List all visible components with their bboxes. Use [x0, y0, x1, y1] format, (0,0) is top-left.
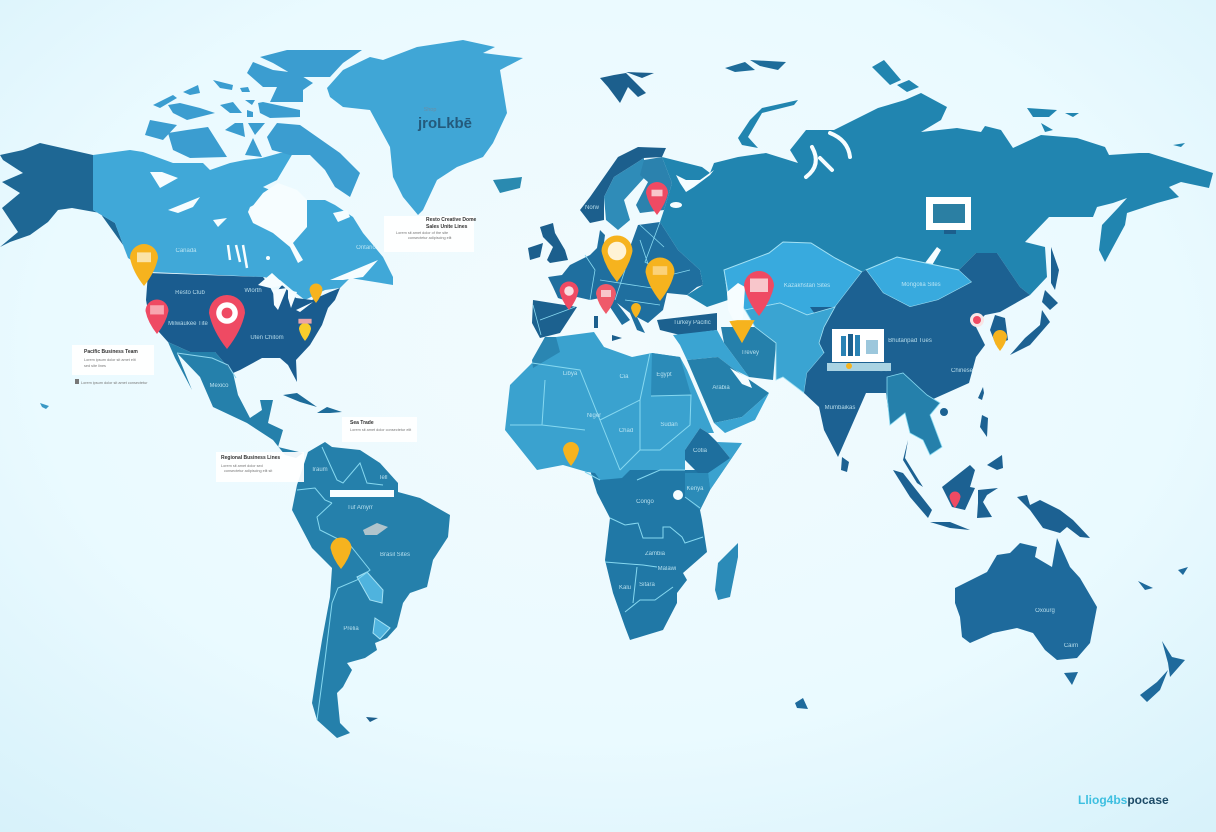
callout: north Atlantic: consectetur adipiscing elit	[408, 236, 452, 240]
pin: Iran	[729, 320, 755, 343]
South America labels: Prelia	[343, 626, 359, 632]
Ireland	[528, 243, 543, 260]
Mongolia	[866, 257, 972, 307]
pin: Toronto	[310, 284, 322, 303]
Continental Europe	[548, 222, 703, 333]
callout: Caribbean: Sea Trade	[350, 420, 374, 426]
Hudson Bay	[248, 183, 307, 263]
New Guinea	[1017, 495, 1090, 538]
region: Oceania	[795, 538, 1188, 709]
region: North America	[0, 40, 523, 458]
Africa labels: Zambia	[645, 551, 666, 557]
lake	[363, 523, 388, 535]
Africa labels: Sitara	[639, 582, 655, 588]
China	[810, 253, 1030, 400]
Java	[930, 522, 970, 530]
Japan	[1010, 290, 1058, 355]
South America labels: Iraum	[312, 467, 328, 473]
Svalbard	[600, 72, 654, 103]
Novaya Zemlya	[738, 100, 798, 148]
Greenland	[327, 40, 523, 215]
Canada	[93, 150, 393, 300]
callout: north Atlantic: Lorem sit amet dolor of the site	[396, 231, 448, 235]
callout: South America: consectetur adipiscing elit sit	[224, 469, 273, 473]
pin: Washington	[298, 319, 312, 341]
Somalia	[708, 442, 742, 490]
callout: Pacific	[72, 345, 154, 375]
South America labels: Tell	[378, 475, 388, 481]
Philippines	[980, 415, 1003, 470]
Africa labels: Kalu	[619, 585, 631, 591]
Cuba and Hispaniola	[283, 393, 342, 413]
Madagascar	[715, 543, 738, 600]
callout: Caribbean: Lorem sit amet dolor consectetur elit	[350, 428, 412, 432]
Gulf	[730, 368, 752, 388]
Paraguay and Uruguay	[357, 572, 390, 639]
Greenland title	[417, 107, 472, 132]
Korea	[990, 315, 1008, 345]
Canadian Arctic islands	[145, 50, 362, 158]
pin: Japan	[993, 330, 1007, 351]
Baffin Island	[267, 123, 360, 197]
callout: north Atlantic: Sales Unite Lines	[426, 224, 468, 230]
Eurasia labels: Mongolia Sites	[901, 282, 941, 288]
Hainan	[940, 408, 948, 416]
Ob Gulf channels	[806, 133, 850, 177]
North America labels: Canada	[175, 248, 197, 254]
pin: Korea red	[970, 313, 984, 327]
Tasmania	[1064, 672, 1078, 685]
North America labels: Ontario	[356, 245, 376, 251]
callout: South America: Regional Business Lines	[221, 455, 280, 461]
Africa labels: Chad	[619, 428, 633, 434]
footer logo: Lliog4bspocase	[1078, 793, 1169, 807]
pin: West Africa	[563, 442, 579, 466]
Eurasia labels: Kazakhstan Sites	[784, 283, 830, 289]
pin: Romania	[646, 258, 674, 301]
Southern Africa	[590, 443, 742, 640]
pin: Germany	[602, 236, 632, 282]
South America labels	[312, 467, 410, 632]
borders	[297, 447, 383, 720]
Australia labels	[1035, 608, 1078, 649]
Central Asia and Pakistan	[745, 303, 835, 393]
region: Asia	[660, 60, 1213, 538]
Arabia	[687, 357, 769, 423]
Africa labels: Cotia	[693, 448, 708, 454]
pin: France	[560, 282, 578, 310]
Ethiopia	[685, 428, 730, 475]
Sri Lanka	[841, 457, 849, 472]
Mediterranean islands	[560, 316, 622, 341]
Kenya and Uganda	[685, 473, 710, 510]
pin: Greece	[631, 303, 641, 318]
White Sea	[676, 170, 714, 192]
Africa labels: Cia	[619, 374, 629, 380]
South America landmass	[292, 442, 450, 738]
Pacific islands	[795, 567, 1188, 709]
India	[804, 353, 900, 457]
Africa labels: Niger	[587, 413, 601, 419]
Lake Baikal	[925, 247, 941, 267]
Borneo	[942, 465, 975, 510]
Australia	[955, 538, 1097, 660]
region: Africa	[505, 332, 742, 640]
pin: Peru	[330, 538, 352, 569]
map labels	[168, 107, 1078, 649]
Arctic islands	[872, 60, 1185, 147]
Egypt	[651, 353, 691, 396]
Franz Josef Land	[725, 60, 786, 72]
Indochina	[887, 373, 942, 455]
Northern Africa	[505, 332, 714, 480]
North America labels	[168, 245, 376, 389]
North America labels: Resto Club	[175, 290, 206, 296]
African borders	[510, 353, 703, 612]
Finland	[636, 157, 672, 213]
North America labels: Milwaukee Tite	[168, 321, 209, 327]
Yemen and Oman	[714, 393, 769, 433]
callout: north Atlantic: Resto Creative Dome	[426, 217, 477, 223]
Eurasia labels: Turkey Pacific	[673, 320, 711, 326]
Mexico and Central America	[168, 342, 303, 458]
Sweden	[604, 158, 644, 230]
Great Lakes	[258, 273, 313, 312]
Greenland title: Shop	[424, 107, 436, 113]
pins	[130, 182, 1007, 569]
pin: Borneo	[950, 492, 960, 508]
Eurasia labels: Arabia	[712, 385, 730, 391]
Africa labels	[563, 371, 708, 591]
Iceland	[493, 177, 522, 193]
Turkey	[657, 313, 717, 335]
callout: Pacific: Pacific Business Team	[84, 349, 138, 355]
pin: Caspian	[744, 271, 774, 316]
Eurasia labels: Norw	[585, 205, 600, 211]
Sulawesi	[977, 488, 998, 518]
Iberia	[532, 300, 577, 338]
Hawaii	[40, 403, 49, 409]
South America labels: Brasil Sites	[380, 552, 410, 558]
Lake Victoria	[673, 490, 683, 500]
Africa labels: Libya	[563, 371, 578, 377]
pin: Finland	[646, 182, 668, 215]
Kazakhstan	[724, 242, 862, 315]
North America labels: Uten Chitom	[250, 335, 284, 341]
North America labels: Mexico	[209, 383, 229, 389]
Russia	[660, 93, 1213, 307]
pin: Italy	[596, 284, 616, 314]
Eurasia labels: Mumbaikas	[825, 405, 855, 411]
Taiwan	[978, 387, 984, 400]
Iran	[721, 327, 776, 380]
pin: central US	[209, 295, 245, 349]
Malay Peninsula	[903, 440, 923, 487]
region: Europe	[528, 72, 717, 341]
Sakhalin	[1051, 247, 1059, 290]
callout: South America: Lorem sit amet dolor sed	[221, 464, 263, 468]
pin: Vancouver	[130, 244, 158, 286]
Eurasia labels: Trevey	[741, 350, 759, 356]
legend line: Lorem ipsum dolor sit amet consectetur	[81, 381, 148, 385]
pin: California	[146, 300, 168, 334]
Australia labels: Oxourg	[1035, 608, 1055, 614]
callout: north Atlantic	[384, 216, 477, 252]
United States	[146, 273, 340, 382]
Morocco	[532, 337, 560, 368]
Ladoga	[670, 202, 682, 208]
legend line	[75, 379, 148, 385]
callout: South America	[216, 452, 304, 482]
Levant and Iraq	[673, 330, 749, 377]
icon: monitor over Russia	[926, 197, 971, 234]
Sumatra	[893, 470, 932, 518]
Caspian Sea	[727, 283, 745, 325]
Greenland title: jroLkbē	[417, 115, 472, 132]
Africa labels: Congo	[636, 499, 654, 505]
North America labels: Wlorth	[244, 288, 262, 294]
South America labels: Tuf Amyrr	[347, 505, 373, 511]
Africa labels: Sudan	[660, 422, 678, 428]
callout: Caribbean	[342, 417, 417, 442]
Africa labels: Kenya	[686, 486, 704, 492]
Eurasia labels	[585, 205, 974, 411]
Eurasia labels: Chinese	[951, 368, 974, 374]
Falkland	[366, 717, 378, 722]
Alaska	[0, 143, 128, 258]
Eurasia labels: Bhutanpad Tues	[888, 338, 932, 344]
Norway	[580, 147, 666, 223]
Canadian lakes	[150, 172, 378, 280]
Mexico US border	[177, 353, 236, 378]
callout: Pacific: sed site lines	[84, 364, 106, 368]
European borders	[533, 222, 690, 335]
region: South America	[292, 442, 450, 738]
Africa labels: Egypt	[656, 372, 672, 378]
New Zealand	[1140, 641, 1185, 702]
callout: Pacific: Lorem ipsum dolor sit amet elit	[84, 358, 137, 362]
UK	[540, 223, 568, 263]
Africa labels: Malawi	[658, 566, 676, 572]
Australia labels: Cairn	[1064, 643, 1078, 649]
white bar	[330, 490, 394, 497]
icon: laptop with bar chart	[827, 329, 891, 371]
